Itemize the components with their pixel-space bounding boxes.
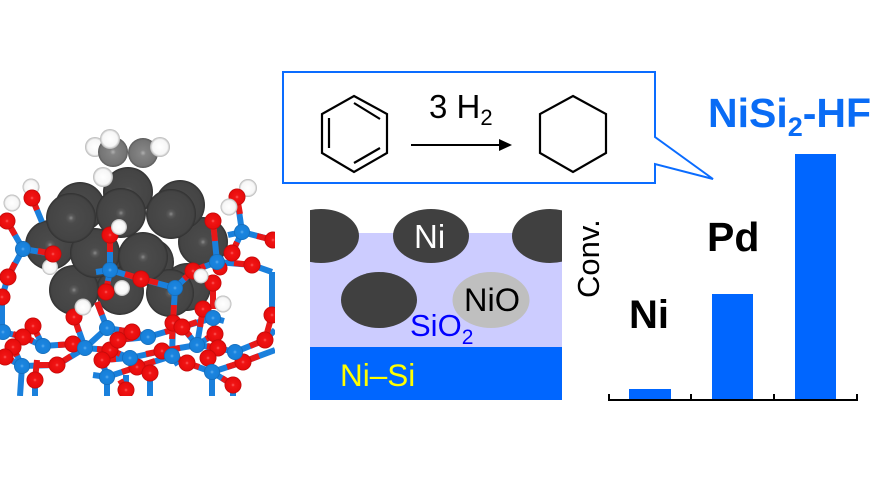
benzene molecule atoms [85,129,170,187]
Ni-Si label: Ni–Si [340,357,415,393]
Ni particles [310,209,562,328]
Ni-Si substrate [310,347,562,400]
reagent label: 3 H [429,88,480,125]
bar: NiSi2-HF [795,154,836,399]
benzene structure [322,96,387,172]
reagent label: 2 [480,105,493,130]
SiO2 label: 2 [462,326,473,349]
reaction arrow [411,139,512,151]
SiO2 layer [310,233,562,347]
y axis label: Conv. [571,219,606,298]
SiO2 label: SiO [410,308,462,343]
label: Ni: Ni [629,293,669,337]
label: NiSi2-HF: -HF [803,90,871,136]
label: NiSi2-HF: NiSi [708,90,788,136]
bar chart: conversion [571,90,871,400]
NiO label: NiO [464,282,520,318]
Ni label: Ni [414,218,445,255]
silica oxygen, silicon and hydrogen atoms [0,178,282,398]
label: NiSi2-HF: 2 [788,112,803,142]
molecular model of benzene on Ni cluster over silica [0,129,282,398]
bar: Pd [712,294,753,399]
bar: Ni [629,389,671,399]
Ni cluster spheres [25,167,228,317]
NiO particle [452,272,530,328]
silica network bonds [2,197,275,396]
graphical abstract [0,71,870,401]
x axis [609,394,857,400]
cyclohexane structure [540,96,606,172]
callout: reaction scheme [283,72,713,183]
callout outline [283,72,713,183]
label: Pd: Pd [707,214,759,260]
catalyst film schematic [310,209,562,400]
